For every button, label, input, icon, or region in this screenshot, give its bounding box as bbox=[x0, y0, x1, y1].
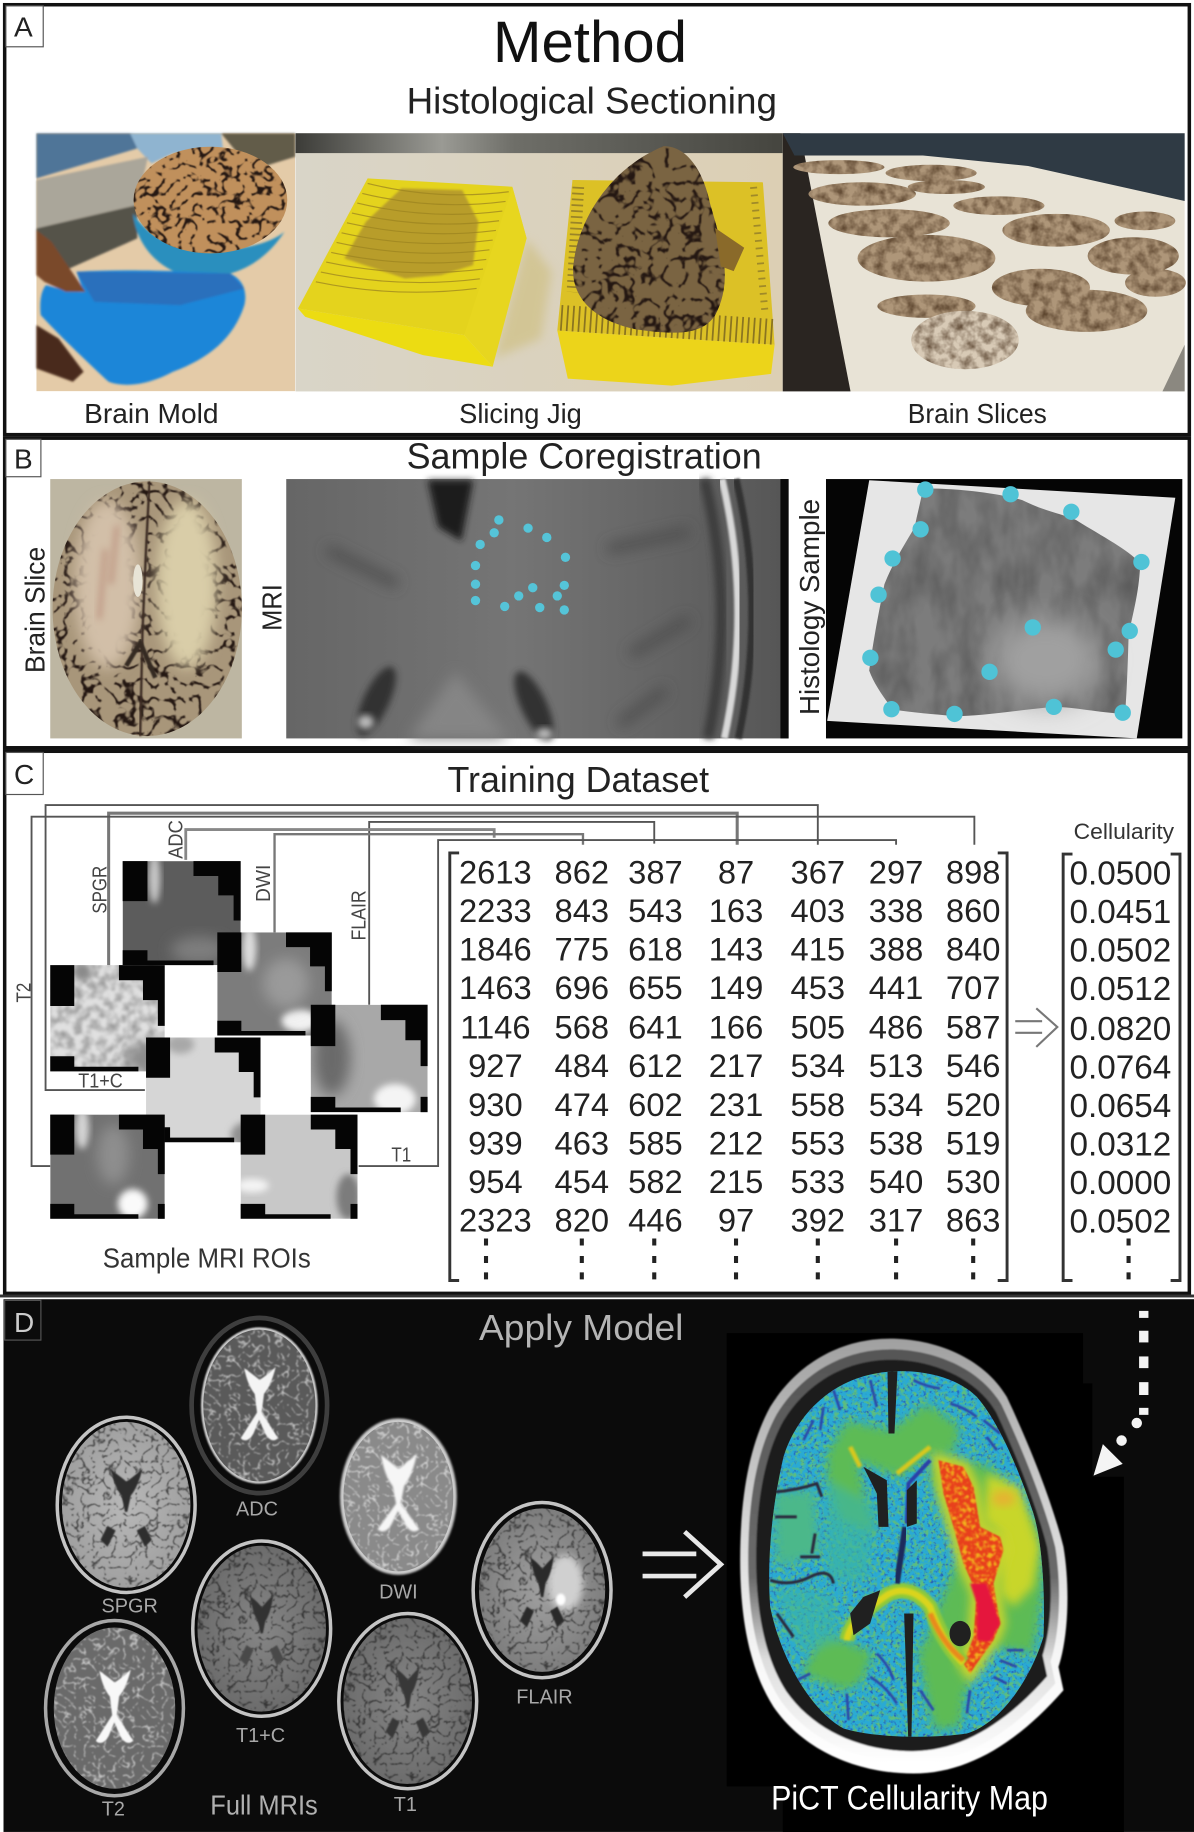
ROI tile: SPGR bbox=[50, 963, 170, 1075]
ROI labels: SPGR bbox=[89, 866, 111, 914]
cellularity vector: 0.0451 bbox=[1069, 894, 1171, 931]
data matrix: 403 bbox=[791, 892, 845, 929]
data matrix: 582 bbox=[628, 1163, 683, 1200]
data matrix: 453 bbox=[791, 969, 845, 1006]
data matrix: 534 bbox=[791, 1047, 845, 1084]
panel label A bbox=[6, 6, 43, 47]
data matrix: 513 bbox=[869, 1047, 923, 1084]
data matrix: 898 bbox=[946, 853, 1000, 890]
skull and scalp bbox=[740, 1339, 1067, 1774]
ROI labels: FLAIR bbox=[349, 890, 371, 941]
connector lines from ROIs to matrix columns bbox=[32, 805, 974, 1166]
cellularity vector bbox=[1063, 854, 1180, 1281]
MRI sequence labels: T2 bbox=[102, 1799, 125, 1821]
cellularity vector: 0.0764 bbox=[1069, 1049, 1171, 1086]
black backing for map bbox=[727, 1333, 1124, 1832]
data matrix: 454 bbox=[555, 1163, 609, 1200]
label: Histology Sample: Histology Sample bbox=[794, 499, 825, 715]
data matrix: 519 bbox=[946, 1124, 1000, 1161]
brain MRI: T2 bbox=[46, 1620, 183, 1796]
data matrix: 215 bbox=[709, 1163, 763, 1200]
data matrix: 149 bbox=[709, 969, 763, 1006]
data matrix: 538 bbox=[869, 1124, 923, 1161]
caption: PiCT Cellularity Map: PiCT Cellularity Map bbox=[771, 1780, 1048, 1818]
caption: Slicing Jig: Slicing Jig bbox=[459, 398, 582, 429]
ROI tile: T1+C bbox=[146, 1038, 261, 1142]
white filler tiles bbox=[165, 965, 311, 1115]
MRI sequence labels: T1+C bbox=[236, 1725, 285, 1747]
panel label A: A bbox=[14, 11, 33, 42]
cellularity vector: 0.0500 bbox=[1069, 855, 1171, 892]
panel label B: B bbox=[14, 444, 33, 475]
dashed arrow into map bbox=[1094, 1311, 1148, 1476]
data matrix: 387 bbox=[628, 853, 683, 890]
data matrix: 553 bbox=[791, 1124, 845, 1161]
data matrix: 534 bbox=[869, 1086, 923, 1123]
colour map bbox=[763, 1367, 1050, 1740]
data matrix: 1463 bbox=[459, 969, 532, 1006]
data matrix: 543 bbox=[628, 892, 683, 929]
panel label D: D bbox=[14, 1307, 34, 1338]
title: Method: Method bbox=[493, 10, 687, 75]
data matrix: 843 bbox=[555, 892, 609, 929]
MRI sequence labels: FLAIR bbox=[516, 1686, 573, 1708]
arrow: MRIs to map bbox=[643, 1532, 721, 1597]
data matrix: 546 bbox=[946, 1047, 1000, 1084]
arrow: matrix to cellularity bbox=[1015, 1008, 1057, 1047]
data matrix: 927 bbox=[468, 1047, 523, 1084]
photo: slicing jig bbox=[296, 133, 783, 391]
data matrix: 602 bbox=[628, 1086, 683, 1123]
photo: brain slices bbox=[783, 133, 1186, 391]
data matrix: 860 bbox=[946, 892, 1000, 929]
brain MRI: DWI bbox=[340, 1418, 457, 1575]
panel A: histological sectioning bbox=[5, 5, 1189, 435]
ROI tile: ADC bbox=[123, 853, 241, 965]
MRI sequence labels: SPGR bbox=[102, 1595, 158, 1617]
cellularity vector: 0.0000 bbox=[1069, 1165, 1171, 1202]
ROI tile: FLAIR bbox=[311, 1005, 428, 1115]
brain MRI: T1+C bbox=[193, 1541, 331, 1716]
data matrix: 486 bbox=[869, 1009, 923, 1046]
ROI labels: T1+C bbox=[78, 1071, 123, 1093]
ROI labels: DWI bbox=[253, 865, 275, 902]
MRI sequence labels: ADC bbox=[236, 1498, 278, 1520]
ROI labels bbox=[13, 820, 411, 1166]
heading: Sample Coregistration: Sample Coregistration bbox=[407, 436, 762, 477]
label: MRI: MRI bbox=[257, 584, 288, 631]
data matrix: 231 bbox=[709, 1086, 763, 1123]
ROI tile: T2 bbox=[50, 1108, 165, 1219]
data matrix: 388 bbox=[869, 930, 923, 967]
data matrix: 338 bbox=[869, 892, 923, 929]
data matrix: 939 bbox=[468, 1124, 523, 1161]
MRI sequence labels: DWI bbox=[379, 1581, 418, 1603]
data matrix: 840 bbox=[946, 930, 1000, 967]
data matrix: 97 bbox=[718, 1201, 754, 1238]
data matrix: 505 bbox=[791, 1009, 845, 1046]
data matrix: 317 bbox=[869, 1201, 923, 1238]
data matrix: 166 bbox=[709, 1009, 763, 1046]
data matrix: 1846 bbox=[459, 930, 532, 967]
panel label B bbox=[6, 439, 41, 477]
data matrix: 696 bbox=[555, 969, 609, 1006]
data matrix: 587 bbox=[946, 1009, 1000, 1046]
panel label D bbox=[5, 1300, 41, 1340]
data matrix: 954 bbox=[468, 1163, 523, 1200]
data matrix: 568 bbox=[555, 1009, 609, 1046]
caption: Full MRIs: Full MRIs bbox=[210, 1789, 318, 1820]
image: histology sample with landmarks bbox=[826, 479, 1182, 738]
data matrix: 143 bbox=[709, 930, 763, 967]
image: MRI slice with landmarks bbox=[286, 479, 789, 745]
label: Brain Slice: Brain Slice bbox=[19, 547, 50, 673]
brain MRI: FLAIR bbox=[473, 1502, 611, 1678]
cellularity vector: 0.0820 bbox=[1069, 1011, 1171, 1048]
panel label C: C bbox=[14, 759, 34, 790]
data matrix: 775 bbox=[555, 930, 609, 967]
data matrix: 2613 bbox=[459, 853, 532, 890]
data matrix: 612 bbox=[628, 1047, 683, 1084]
data matrix: 2323 bbox=[459, 1201, 532, 1238]
data matrix: 217 bbox=[709, 1047, 763, 1084]
ROI tile: T1 bbox=[236, 1115, 360, 1220]
brain MRI: SPGR bbox=[57, 1417, 195, 1592]
caption: Sample MRI ROIs: Sample MRI ROIs bbox=[103, 1243, 311, 1274]
data matrix: 474 bbox=[555, 1086, 609, 1123]
data matrix: 618 bbox=[628, 930, 683, 967]
data matrix: 163 bbox=[709, 892, 763, 929]
data matrix: 484 bbox=[555, 1047, 609, 1084]
data matrix: 540 bbox=[869, 1163, 923, 1200]
data matrix: 930 bbox=[468, 1086, 523, 1123]
data matrix: 585 bbox=[628, 1124, 683, 1161]
data matrix: 297 bbox=[869, 853, 923, 890]
brain in jig bbox=[573, 146, 725, 333]
data matrix: 863 bbox=[946, 1201, 1000, 1238]
brain MRI: T1 bbox=[339, 1613, 477, 1789]
cellularity vector: 0.0654 bbox=[1069, 1088, 1171, 1125]
panel D: apply model bbox=[0, 1295, 1194, 1832]
cellularity vector: 0.0512 bbox=[1069, 971, 1171, 1008]
heading: Apply Model: Apply Model bbox=[479, 1307, 683, 1348]
ROI labels: ADC bbox=[165, 820, 187, 859]
data matrix: 533 bbox=[791, 1163, 845, 1200]
photo: brain mold bbox=[36, 133, 295, 391]
data matrix: 530 bbox=[946, 1163, 1000, 1200]
data matrix: 2233 bbox=[459, 892, 532, 929]
data matrix: 463 bbox=[555, 1124, 609, 1161]
heading: Histological Sectioning: Histological Sectioning bbox=[407, 79, 777, 121]
brain MRI: ADC bbox=[192, 1318, 327, 1493]
data matrix: 446 bbox=[628, 1201, 683, 1238]
right jig block bbox=[557, 180, 775, 345]
data matrix: 441 bbox=[869, 969, 923, 1006]
cellularity vector: 0.0502 bbox=[1069, 933, 1171, 970]
data matrix: 558 bbox=[791, 1086, 845, 1123]
panel label C bbox=[6, 752, 43, 794]
data matrix: 415 bbox=[791, 930, 845, 967]
heading: Training Dataset: Training Dataset bbox=[447, 759, 709, 800]
data matrix: 655 bbox=[628, 969, 683, 1006]
ROI tile: DWI bbox=[217, 926, 332, 1035]
cellularity vector: 0.0312 bbox=[1069, 1127, 1171, 1164]
panel C: training dataset bbox=[5, 751, 1189, 1293]
PiCT cellularity map bbox=[740, 1339, 1067, 1774]
histology landmark dots bbox=[862, 481, 1150, 722]
caption: Brain Slices: Brain Slices bbox=[908, 398, 1047, 429]
ROI labels: T1 bbox=[391, 1144, 411, 1166]
cellularity vector: 0.0502 bbox=[1069, 1204, 1171, 1241]
ROI labels: T2 bbox=[13, 983, 35, 1002]
caption: Brain Mold: Brain Mold bbox=[84, 398, 218, 429]
MRI sequence labels bbox=[102, 1498, 573, 1821]
data matrix: 87 bbox=[718, 853, 754, 890]
data matrix: 641 bbox=[628, 1009, 683, 1046]
MRI sequence labels: T1 bbox=[394, 1794, 417, 1816]
left jig block bbox=[298, 178, 552, 367]
panel B: sample coregistration bbox=[5, 436, 1189, 748]
data matrix: 707 bbox=[946, 969, 1000, 1006]
MRI landmark dots bbox=[471, 515, 570, 615]
data matrix: 520 bbox=[946, 1086, 1000, 1123]
data matrix: 392 bbox=[791, 1201, 845, 1238]
cellularity label: Cellularity bbox=[1074, 819, 1175, 844]
data matrix: 212 bbox=[709, 1124, 763, 1161]
data matrix bbox=[450, 853, 1007, 1281]
photo: brain slice bbox=[50, 479, 242, 738]
data matrix: 367 bbox=[791, 853, 845, 890]
data matrix: 862 bbox=[555, 853, 609, 890]
data matrix: 820 bbox=[555, 1201, 609, 1238]
data matrix: 1146 bbox=[460, 1009, 531, 1046]
